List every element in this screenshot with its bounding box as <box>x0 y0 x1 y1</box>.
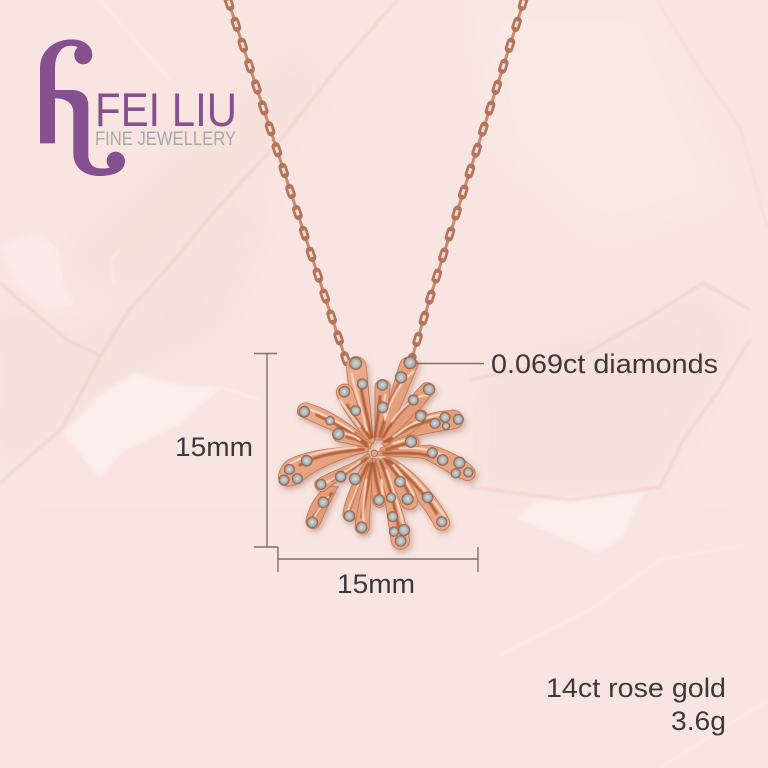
width dimension bracket <box>278 547 478 572</box>
logo name: FEI LIU <box>95 83 237 136</box>
diamonds leader line <box>416 362 484 364</box>
label: material: 14ct rose gold <box>546 673 726 703</box>
label: diamonds: 0.069ct diamonds <box>491 349 718 379</box>
height dimension bracket <box>254 354 278 547</box>
pendant petals <box>278 357 475 549</box>
label: height: 15mm <box>175 432 253 462</box>
pendant <box>278 357 475 549</box>
necklace chain left <box>228 0 352 378</box>
marble light patches <box>0 233 643 552</box>
pendant diamonds <box>279 357 473 546</box>
label: weight: 3.6g <box>671 706 726 736</box>
petal shading <box>300 377 437 527</box>
logo tagline: FINE JEWELLERY <box>95 129 236 150</box>
marble veins <box>0 0 750 500</box>
label: width: 15mm <box>337 569 415 599</box>
pendant centre <box>371 450 378 457</box>
logo <box>40 39 237 176</box>
necklace chain right <box>408 0 524 372</box>
logo mark <box>40 39 125 176</box>
